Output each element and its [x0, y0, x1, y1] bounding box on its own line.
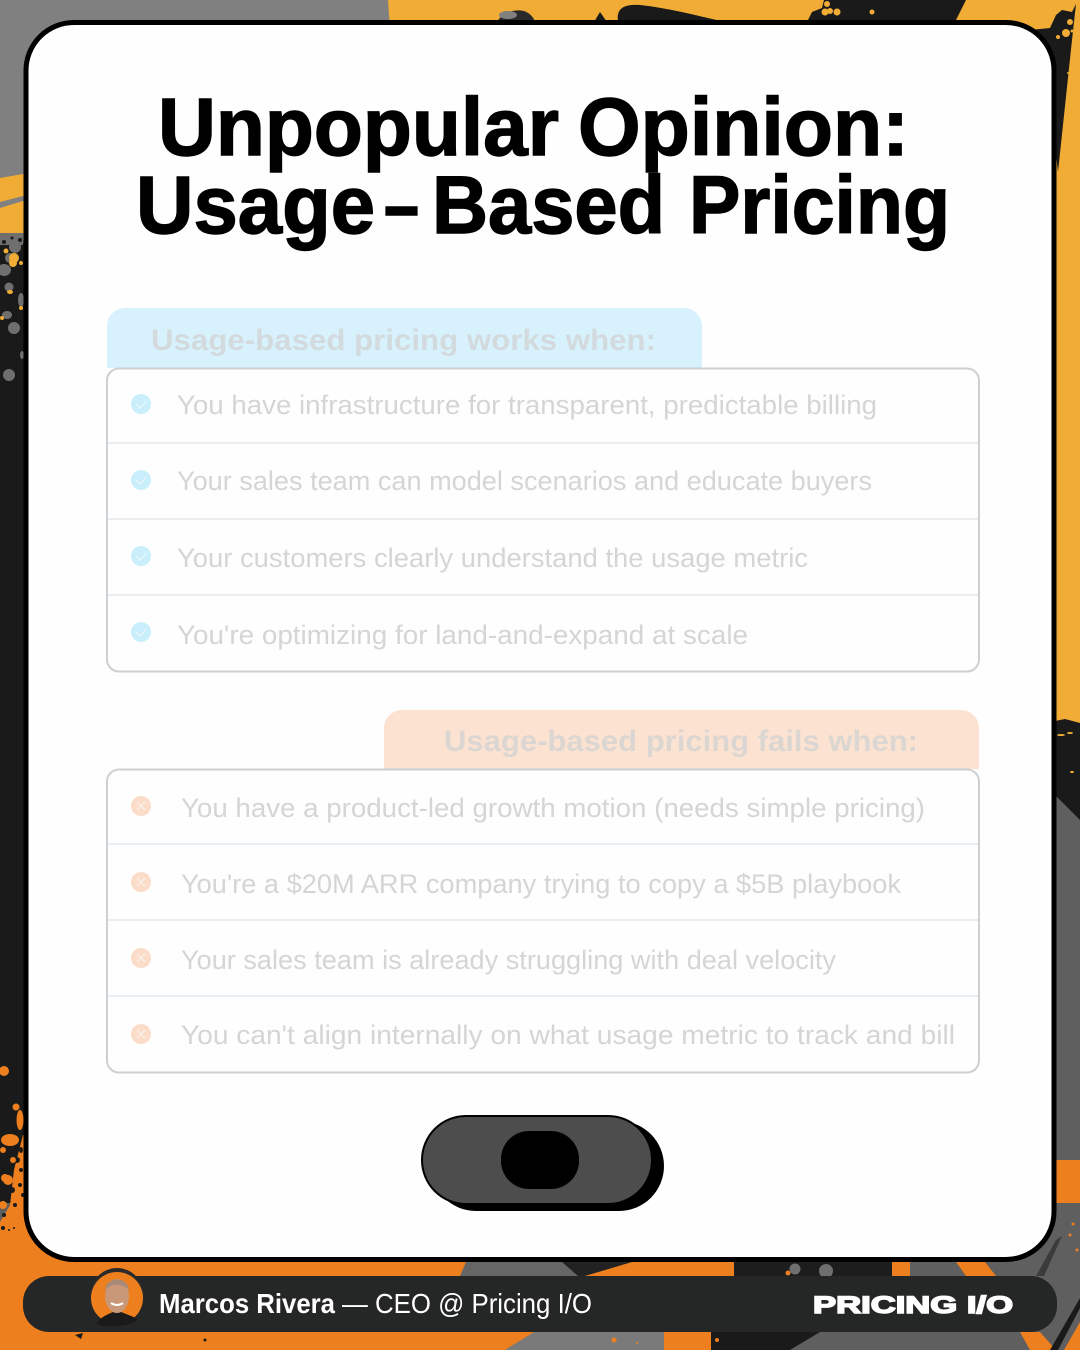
background: dark brush marks at top: [497, 0, 1076, 172]
row 1: fails: You have a product-led growth motion (needs simple pricing): [181, 793, 925, 823]
title: Based: [432, 160, 665, 251]
author name: Marcos Rivera: [159, 1288, 335, 1319]
row dividers: fails: [108, 844, 978, 996]
title: Opinion:: [578, 82, 909, 173]
footer bar: [23, 1268, 1057, 1332]
row 4: fails: You can't align internally on what usage metric to track and bill: [181, 1020, 955, 1050]
list box: works: [107, 368, 979, 672]
brand wordmark: PRICING I/O: [813, 1292, 1013, 1319]
tab: fails heading: Usage-based pricing fails when:: [444, 725, 918, 758]
row 3: fails: Your sales team is already struggling with deal velocity: [181, 945, 836, 975]
row dividers: works: [108, 443, 978, 595]
panel: fails when: [107, 710, 979, 1072]
title: [136, 82, 950, 251]
row 1: works: You have infrastructure for transparent, predictable billing: [177, 390, 877, 420]
panel: works when: [107, 308, 979, 672]
row 2: fails: You're a $20M ARR company trying to copy a $5B playbook: [181, 869, 902, 899]
title: –: [384, 160, 419, 251]
list box: fails: [107, 770, 979, 1072]
tab: works heading: [107, 308, 702, 368]
row 3: works: Your customers clearly understand the usage metric: [177, 543, 808, 573]
tab: fails heading: [384, 710, 979, 769]
row 2: works: Your sales team can model scenarios and educate buyers: [177, 466, 872, 496]
row 4: works: You're optimizing for land-and-expand at scale: [177, 620, 748, 650]
author photo: [90, 1268, 144, 1326]
author role: — CEO @ Pricing I/O: [342, 1288, 592, 1319]
button: [422, 1116, 664, 1211]
title: Unpopular: [158, 82, 559, 173]
title: Usage: [136, 160, 375, 251]
tab: works heading: Usage-based pricing works when:: [151, 324, 656, 357]
title: Pricing: [689, 160, 950, 251]
